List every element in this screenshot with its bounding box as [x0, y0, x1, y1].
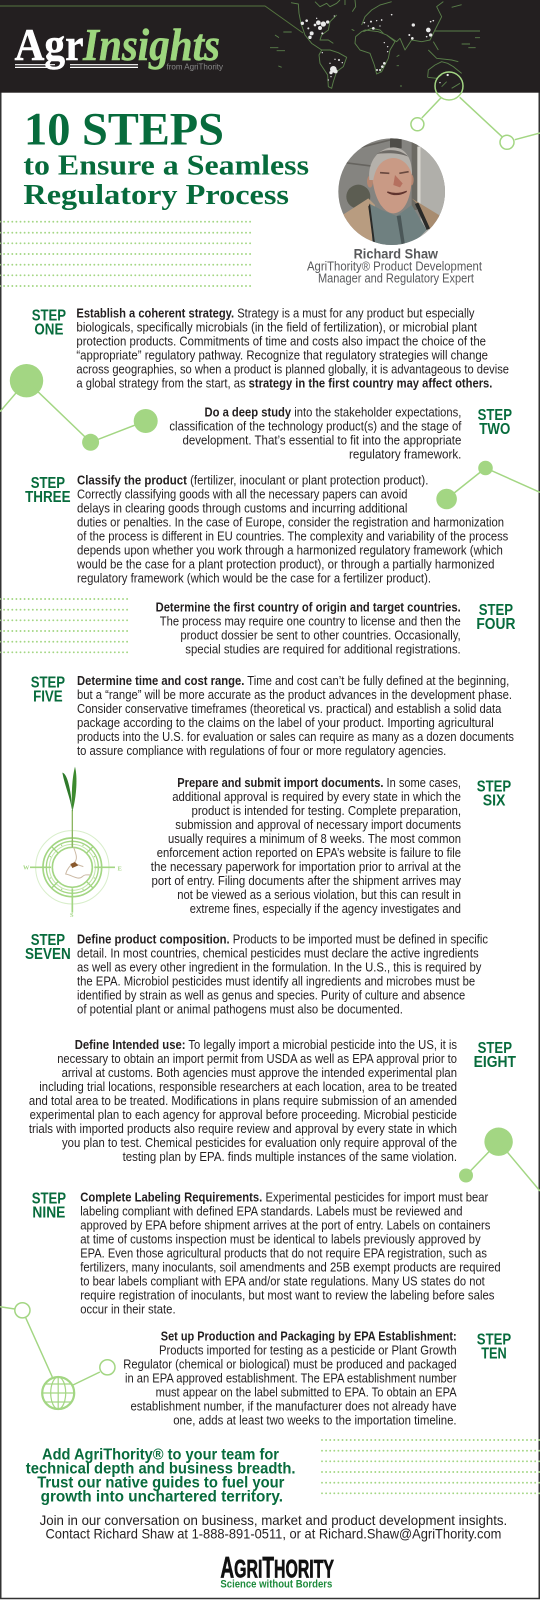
step one label: ONE — [34, 322, 63, 339]
step four text: Determine the first country of origin and target countries. — [156, 600, 461, 615]
step two text: regulatory framework. — [349, 447, 461, 462]
step ten label: TEN — [481, 1345, 507, 1362]
step eight text: necessary to obtain an import permit from USDA as well as EPA approval prior to — [57, 1051, 457, 1066]
contact text — [40, 1512, 507, 1542]
step one label: STEP — [32, 308, 66, 325]
step one label — [32, 308, 66, 339]
step four text: The process may require one country to license and then the — [160, 614, 461, 629]
step seven label — [25, 932, 71, 963]
step nine text: at time of customs inspection must be identical to labels previously approved by — [80, 1232, 481, 1247]
step eight label: EIGHT — [474, 1054, 516, 1071]
step two text — [169, 405, 462, 462]
step six text: Prepare and submit import documents. In some cases, — [177, 775, 461, 790]
step ten text: establishment number, if the manufacturer does not already have — [130, 1399, 457, 1414]
logo: AgrInsights: from AgriThority — [166, 62, 223, 71]
call to action: growth into unchartered territory. — [41, 1489, 283, 1506]
contact text: Contact Richard Shaw at 1-888-891-0511, or at Richard.Shaw@AgriThority.com — [46, 1526, 501, 1542]
step two text: development. That’s essential to fit into the appropriate — [182, 433, 461, 448]
step six text — [151, 775, 461, 916]
step ten text — [123, 1329, 457, 1428]
step five text: to assure compliance with regulations of four or more regulatory agencies. — [77, 743, 446, 758]
header band — [0, 0, 540, 93]
step ten — [123, 1329, 511, 1428]
logo: AgriThority: Science without Borders — [220, 1579, 332, 1591]
step eight text: Define Intended use: To legally import a microbial pesticide into the US, it is — [75, 1037, 457, 1052]
step seven text: identified by strain as well as genus and species. Purity of culture and absence — [77, 988, 465, 1003]
step seven text: of potential plant or animal pathogens must also be documented. — [77, 1002, 403, 1017]
step ten label — [477, 1331, 511, 1362]
step one text: a global strategy from the start, as strategy in the first country may affect others. — [76, 376, 492, 391]
dotted pattern middle — [0, 599, 127, 652]
step four text: special studies are required for additional registrations. — [185, 642, 461, 657]
step six text: enforcement action reported on EPA’s website is failure to file — [157, 845, 461, 860]
step eight text: testing plan by EPA. finds multiple instances of the same violation. — [123, 1149, 457, 1164]
step five label: FIVE — [33, 689, 63, 706]
step ten text: Set up Production and Packaging by EPA Establishment: — [161, 1329, 457, 1344]
step four text: product dossier be sent to other countries. Occasionally, — [180, 628, 461, 643]
step six text: the necessary paperwork for importation prior to arrival at the — [151, 859, 461, 874]
step six text: port of entry. Filing documents after the shipment arrives may — [152, 873, 461, 888]
icon: seedling with compass: W — [23, 865, 30, 872]
call to action: Add AgriThority® to your team for — [42, 1447, 279, 1464]
step eight text: trials with imported products also require review and approval by every state in which — [29, 1121, 457, 1136]
step two label: TWO — [479, 421, 510, 438]
dotted pattern bottom — [322, 1440, 540, 1493]
step five label — [31, 675, 65, 706]
step ten text: must appear on the label submitted to EPA. To obtain an EPA — [156, 1385, 457, 1400]
step four text — [156, 600, 461, 657]
step eight text — [29, 1037, 457, 1164]
step ten text: Regulator (chemical or biological) must be produced and packaged — [123, 1357, 457, 1372]
step eight — [29, 1037, 516, 1164]
step five text — [77, 673, 514, 758]
step two — [169, 405, 512, 462]
step nine text — [80, 1190, 501, 1317]
step four — [156, 600, 515, 657]
step two text: classification of the technology product(s) and the stage of — [169, 419, 462, 434]
decoration: network left — [0, 364, 158, 451]
icon: seedling with compass — [23, 767, 122, 919]
icon: seedling with compass: S — [70, 912, 74, 919]
portrait caption: Manager and Regulatory Expert — [318, 271, 474, 286]
step eight text: including trial locations, responsible researchers at each location, area to be treated — [39, 1079, 457, 1094]
logo: AgrInsights — [14, 19, 223, 71]
decoration: network right — [436, 461, 540, 509]
step four label — [476, 602, 515, 633]
step seven — [25, 932, 488, 1017]
step three text: delays in clearing goods through customs and incurring additional — [77, 501, 407, 516]
step six text: extreme fines, especially if the agency investigates and — [190, 901, 461, 916]
dotted pattern top — [0, 222, 253, 286]
step nine — [32, 1190, 501, 1317]
step three label: THREE — [25, 489, 71, 506]
title: Regulatory Process — [23, 180, 289, 211]
step three — [25, 473, 509, 586]
step seven text — [77, 932, 488, 1017]
step eight text: and total area to be treated. Modifications in plans require submission of an amended — [29, 1093, 457, 1108]
step nine label: NINE — [32, 1204, 65, 1222]
icon: globe with network — [0, 1303, 115, 1409]
contact text: Join in our conversation on business, market and product development insights. — [40, 1512, 507, 1528]
step eight text: experimental plan to each agency for approval before proceeding. Microbial pesticide — [30, 1107, 457, 1122]
step six text: additional approval is required by every state in which the — [172, 789, 461, 804]
portrait caption — [307, 246, 482, 286]
step six label — [477, 779, 511, 810]
logo: AgrInsights: Insights — [82, 19, 220, 70]
logo: AgriThority: AGRITHORITY — [220, 1551, 334, 1584]
step six text: usually requires a minimum of 8 weeks. The most common — [168, 831, 461, 846]
step three text: Classify the product (fertilizer, inoculant or plant protection product). — [77, 473, 428, 488]
step eight text: arrival at customs. Both agencies must approve the intended experimental plan — [62, 1065, 457, 1080]
step one text: biologicals, specifically microbials (in the field of fertilization), or microbial plant — [76, 320, 477, 335]
step six label: STEP — [477, 779, 511, 796]
step eight label — [474, 1040, 516, 1071]
step six text: product is intended for testing. Complete preparation, — [192, 803, 461, 818]
portrait: Richard Shaw — [338, 138, 445, 245]
call to action: Trust our native guides to fuel your — [37, 1475, 284, 1492]
step ten text: Products imported for testing as a pesticide or Plant Growth — [159, 1343, 457, 1358]
portrait caption: AgriThority® Product Development — [307, 259, 482, 274]
step one text — [76, 306, 509, 391]
step one — [32, 306, 509, 391]
step two label — [478, 407, 512, 438]
step nine text: labeling compliant with defined EPA standards. Labels must be reviewed and — [80, 1204, 462, 1219]
step five — [31, 673, 514, 758]
step seven label: SEVEN — [25, 946, 71, 963]
title: 10 STEPS — [24, 103, 224, 155]
step nine text: occur in their state. — [80, 1302, 176, 1317]
step six — [151, 775, 511, 916]
title: to Ensure a Seamless — [23, 150, 309, 181]
step six text: submission and approval of necessary import documents — [175, 817, 461, 832]
step seven text: Define product composition. Products to be imported must be defined in specific — [77, 932, 488, 947]
step eight label: STEP — [478, 1040, 512, 1057]
step eight text: you plan to test. Chemical pesticides for evaluation only require approval of the — [62, 1135, 457, 1150]
step seven text: detail. In most countries, chemical pesticides must declare the active ingredients — [77, 946, 479, 961]
step one text: Establish a coherent strategy. Strategy is a must for any product but especially — [76, 306, 475, 321]
step ten text: in an EPA approved establishment. The EPA establishment number — [125, 1371, 457, 1386]
world map — [0, 0, 480, 88]
step three text — [76, 473, 509, 586]
title — [23, 103, 309, 211]
decoration: network top right — [411, 72, 540, 149]
step three text: Correctly classifying goods with all the necessary papers can avoid — [77, 487, 407, 502]
logo: AgriThority — [220, 1551, 334, 1591]
step two text: Do a deep study into the stakeholder expectations, — [204, 405, 461, 420]
step nine label: STEP — [32, 1190, 66, 1207]
step four label: FOUR — [476, 616, 515, 633]
step seven label: STEP — [31, 932, 65, 949]
call to action: technical depth and business breadth. — [26, 1461, 296, 1478]
step three text: regulatory framework (which would be the case for a fertilizer product). — [77, 571, 431, 586]
step five label: STEP — [31, 675, 65, 692]
logo: AgrInsights: Agr — [14, 19, 84, 70]
step six label: SIX — [483, 793, 506, 810]
step seven text: the EPA. Microbiol pesticides must identify all ingredients and microbes must be — [77, 974, 475, 989]
step four label: STEP — [479, 602, 513, 619]
step ten text: one, adds at least two weeks to the importation timeline. — [173, 1413, 457, 1428]
step nine label — [32, 1190, 66, 1222]
step three label — [25, 475, 71, 506]
step three label: STEP — [31, 475, 65, 492]
step six text: not be viewed as a serious violation, but this can result in — [177, 887, 461, 902]
icon: seedling with compass: E — [118, 865, 122, 872]
step ten label: STEP — [477, 1331, 511, 1348]
portrait caption: Richard Shaw — [354, 246, 438, 262]
step nine text: Complete Labeling Requirements. Experimental pesticides for import must bear — [80, 1190, 489, 1205]
call to action — [26, 1447, 296, 1506]
decoration: network lower right — [459, 1128, 540, 1191]
step two label: STEP — [478, 407, 512, 424]
